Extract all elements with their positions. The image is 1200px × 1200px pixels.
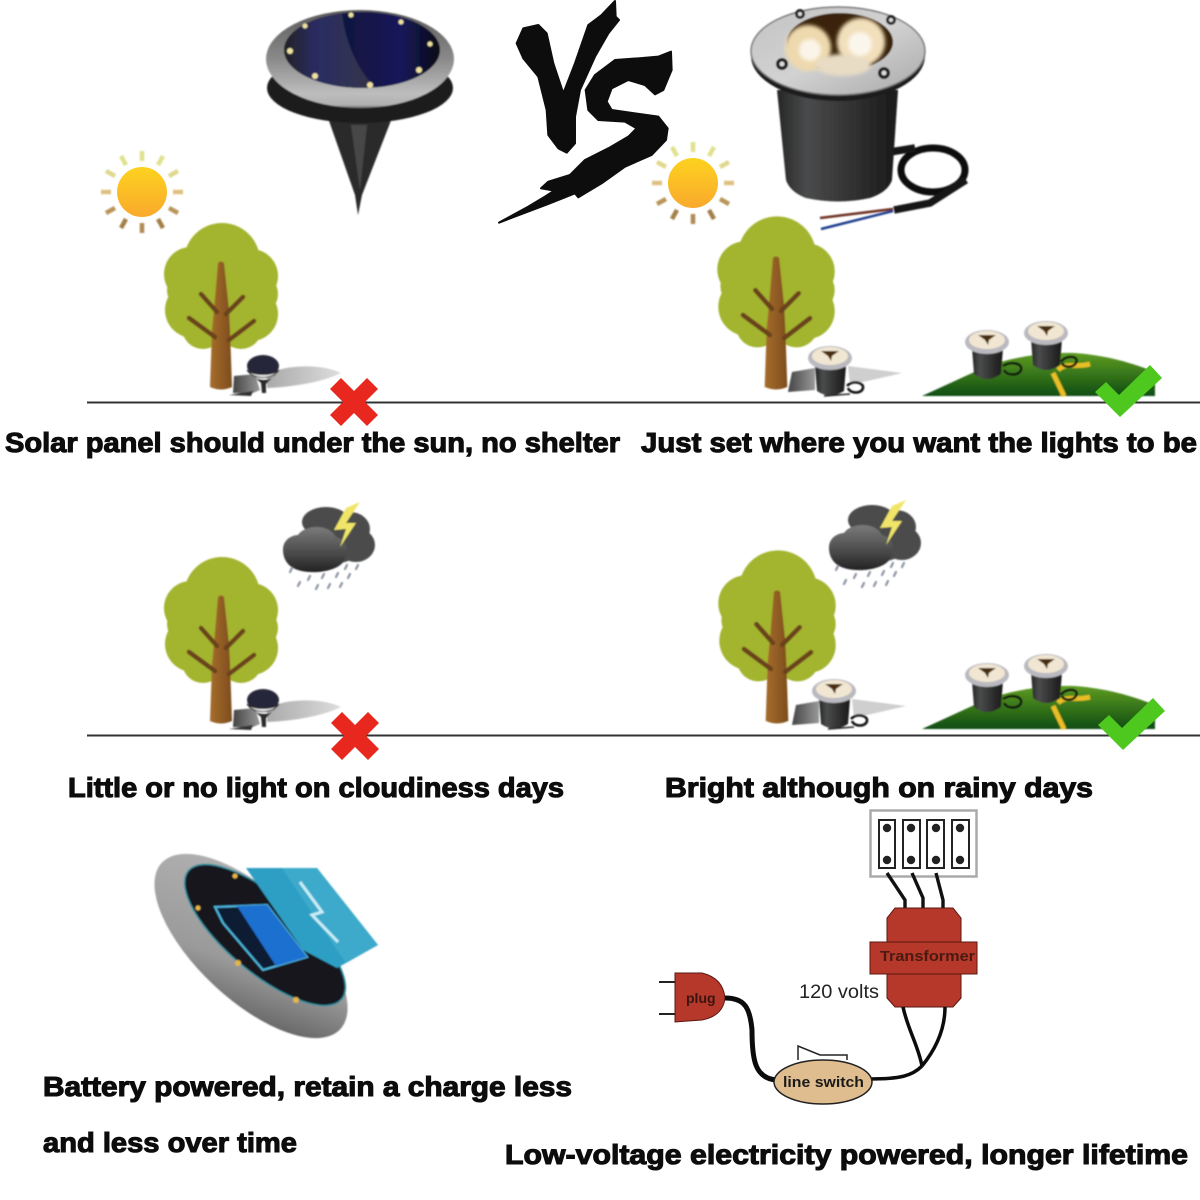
caption: battery line 2: and less over time	[43, 1127, 297, 1158]
caption: low-voltage lifetime: Low-voltage electricity powered, longer lifetime	[505, 1139, 1188, 1170]
plug	[659, 973, 725, 1022]
icon: solar light shaded by tree, row 2	[229, 689, 341, 730]
line switch: line switch	[783, 1075, 864, 1091]
caption: lamp placement: Just set where you want the lights to be	[641, 427, 1197, 458]
icon: storm cloud right	[829, 500, 921, 587]
caption: lamp rainy: Bright although on rainy days	[665, 772, 1093, 803]
voltage label: 120 volts	[799, 982, 879, 1003]
cord to transformer	[870, 1007, 945, 1079]
power cord	[725, 998, 776, 1080]
icon: lamps on lawn, row 1	[922, 321, 1155, 396]
transformer: Transformer	[880, 948, 975, 965]
ground line row 2	[87, 734, 1200, 736]
VS brush lettering	[499, 1, 672, 223]
icon: low-voltage lamp under tree, row 2	[792, 679, 906, 729]
ground line row 1	[87, 402, 1200, 404]
icon: storm cloud left	[283, 502, 375, 589]
icon: tree row 1 left	[164, 223, 278, 390]
caption: solar cloudy: Little or no light on cloudiness days	[68, 772, 564, 803]
solar disc light product	[266, 10, 454, 215]
caption: battery line 1: Battery powered, retain a charge less	[43, 1071, 572, 1102]
icon: sun left	[101, 151, 183, 233]
icon: tree row 2 right	[718, 550, 836, 723]
wiring diagram	[659, 810, 977, 1104]
wires to terminals	[887, 873, 943, 909]
transformer	[870, 908, 977, 1007]
icon: red cross row 1	[330, 378, 378, 426]
icon: tree row 2 left	[164, 557, 278, 724]
icon: low-voltage lamp under tree, row 1	[788, 346, 902, 396]
icon: solar light shaded by tree, row 1	[229, 355, 341, 396]
icon: green check row 2	[1098, 698, 1165, 750]
icon: solar disc with battery	[125, 823, 378, 1069]
icon: red cross row 2	[331, 712, 379, 760]
icon: lamps on lawn, row 2	[922, 654, 1155, 729]
caption: solar sun: Solar panel should under the sun, no shelter	[5, 427, 620, 458]
icon: tree row 1 right	[717, 216, 835, 389]
plug: plug	[686, 990, 716, 1006]
icon: sun right	[652, 142, 734, 224]
icon: green check row 1	[1095, 365, 1162, 417]
terminal block	[870, 810, 976, 876]
in-ground low-voltage lamp product	[751, 7, 966, 229]
line switch	[774, 1046, 872, 1104]
